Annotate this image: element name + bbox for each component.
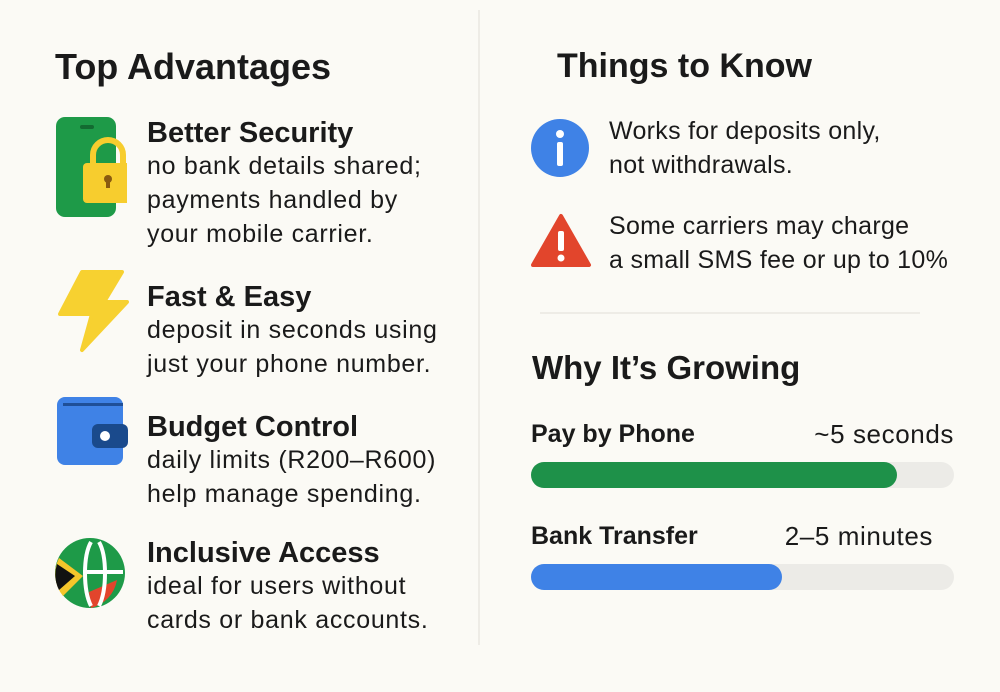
- bar chart: Pay by Phone: ~5 seconds: [814, 419, 954, 449]
- text: Fast & Easy: just your phone number.: [147, 350, 431, 378]
- text: Better Security: payments handled by: [147, 186, 398, 214]
- text: Inclusive Access: Inclusive Access: [147, 537, 380, 569]
- text: Inclusive Access: [147, 537, 429, 634]
- text: Budget Control: daily limits (R200–R600): [147, 446, 436, 474]
- title: Things to Know: Things to Know: [557, 47, 812, 85]
- text: deposits only: not withdrawals.: [609, 151, 793, 179]
- bar chart: Bank Transfer: [531, 521, 954, 590]
- text: Fast & Easy: [146, 281, 438, 378]
- text: Budget Control: Budget Control: [147, 411, 358, 443]
- text: SMS fee: [609, 212, 948, 274]
- icon: lightning: [58, 270, 129, 352]
- text: Better Security: Better Security: [147, 117, 353, 149]
- text: Better Security: your mobile carrier.: [147, 220, 374, 248]
- icon: phone with lock: [56, 117, 127, 217]
- text: Inclusive Access: ideal for users without: [147, 572, 406, 600]
- text: SMS fee: a small SMS fee or up to 10%: [609, 246, 948, 274]
- text: Better Security: no bank details shared;: [147, 152, 422, 180]
- text: deposits only: [609, 117, 881, 179]
- bar chart: Bank Transfer: 2–5 minutes: [785, 521, 933, 551]
- bar chart: Pay by Phone: Pay by Phone: [531, 420, 695, 448]
- title: Why It's Growing: Why It’s Growing: [532, 349, 800, 386]
- bar chart: Pay by Phone: [531, 419, 954, 488]
- icon: info: [531, 119, 589, 177]
- icon: wallet: [57, 397, 128, 465]
- text: Budget Control: [147, 411, 436, 508]
- text: Fast & Easy: deposit in seconds using: [147, 316, 438, 344]
- bar chart: Bank Transfer: Bank Transfer: [531, 522, 698, 550]
- text: SMS fee: Some carriers may charge: [609, 212, 909, 240]
- text: Budget Control: help manage spending.: [147, 480, 422, 508]
- icon: globe flag: [55, 538, 125, 608]
- text: deposits only: Works for deposits only,: [609, 117, 881, 145]
- title: Top Advantages: Top Advantages: [55, 46, 331, 87]
- text: Fast & Easy: Fast & Easy: [147, 281, 311, 313]
- icon: warning: [531, 214, 592, 267]
- text: Better Security: [147, 117, 422, 248]
- text: Inclusive Access: cards or bank accounts.: [147, 606, 429, 634]
